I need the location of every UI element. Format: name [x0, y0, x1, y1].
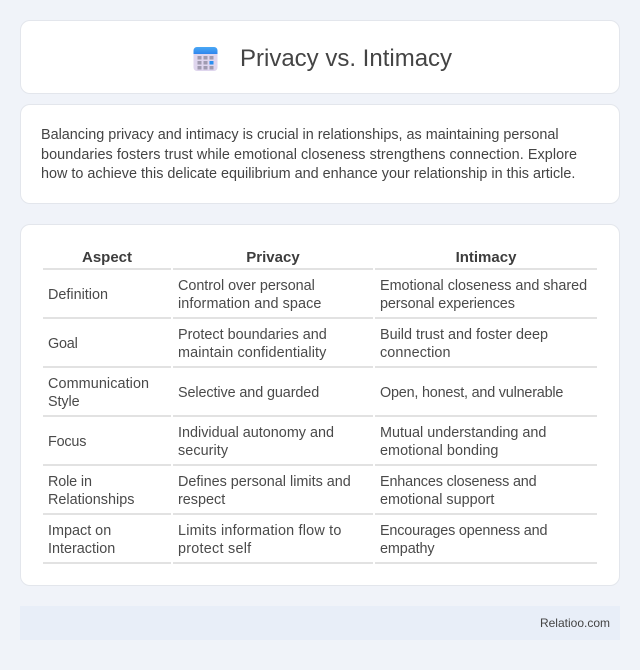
row: Communication Style: Style [48, 394, 80, 410]
table: Protect boundaries and [178, 327, 327, 343]
table: emotional support [380, 492, 494, 508]
row: Goal: Goal [48, 336, 78, 352]
row: Impact on Interaction: Interaction [48, 541, 115, 557]
intro text: boundaries fosters trust while emotional closeness strengthens connection. Explore [41, 146, 577, 162]
footer text: Relatioo.com [540, 616, 610, 630]
table: Open, honest, and vulnerable [380, 385, 563, 401]
title: Privacy vs. Intimacy [240, 45, 452, 72]
row: Impact on Interaction: Impact on [48, 523, 111, 539]
table: Encourages openness and [380, 523, 547, 539]
table: personal experiences [380, 296, 515, 312]
row: Role in Relationships: Relationships [48, 492, 134, 508]
table: Individual autonomy and [178, 425, 334, 441]
title panel [20, 20, 620, 94]
table: maintain confidentiality [178, 345, 326, 361]
table: information and space [178, 296, 322, 312]
table: protect self [178, 541, 251, 557]
table: empathy [380, 541, 434, 557]
table: emotional bonding [380, 443, 498, 459]
table: Enhances closeness and [380, 474, 536, 490]
header: Privacy: Privacy [246, 249, 300, 266]
table panel [20, 224, 620, 586]
row: Impact on Interaction [48, 523, 115, 557]
intro text: how to achieve this delicate equilibrium and enhance your relationship in this article. [41, 166, 575, 182]
table: security [178, 443, 228, 459]
footer bar [20, 606, 620, 640]
row: Role in Relationships: Role in [48, 474, 92, 490]
table: Mutual understanding and [380, 425, 546, 441]
header: Aspect: Aspect [82, 249, 132, 266]
icon: calendar [194, 47, 218, 71]
row: Role in Relationships [48, 474, 134, 508]
table: Control over personal [178, 278, 315, 294]
table: Limits information flow to [178, 523, 342, 539]
row: Focus: Focus [48, 434, 86, 450]
row: Definition: Definition [48, 287, 108, 303]
intro panel [20, 104, 620, 204]
intro text [41, 127, 577, 182]
table: Build trust and foster deep [380, 327, 548, 343]
row: Communication Style [48, 376, 149, 410]
table: connection [380, 345, 451, 361]
table: Emotional closeness and shared [380, 278, 587, 294]
table: Selective and guarded [178, 385, 319, 401]
table: Defines personal limits and [178, 474, 351, 490]
intro text: Balancing privacy and intimacy is crucial in relationships, as maintaining personal [41, 127, 559, 143]
table: respect [178, 492, 225, 508]
header: Intimacy: Intimacy [456, 249, 516, 266]
row: Communication Style: Communication [48, 376, 149, 392]
